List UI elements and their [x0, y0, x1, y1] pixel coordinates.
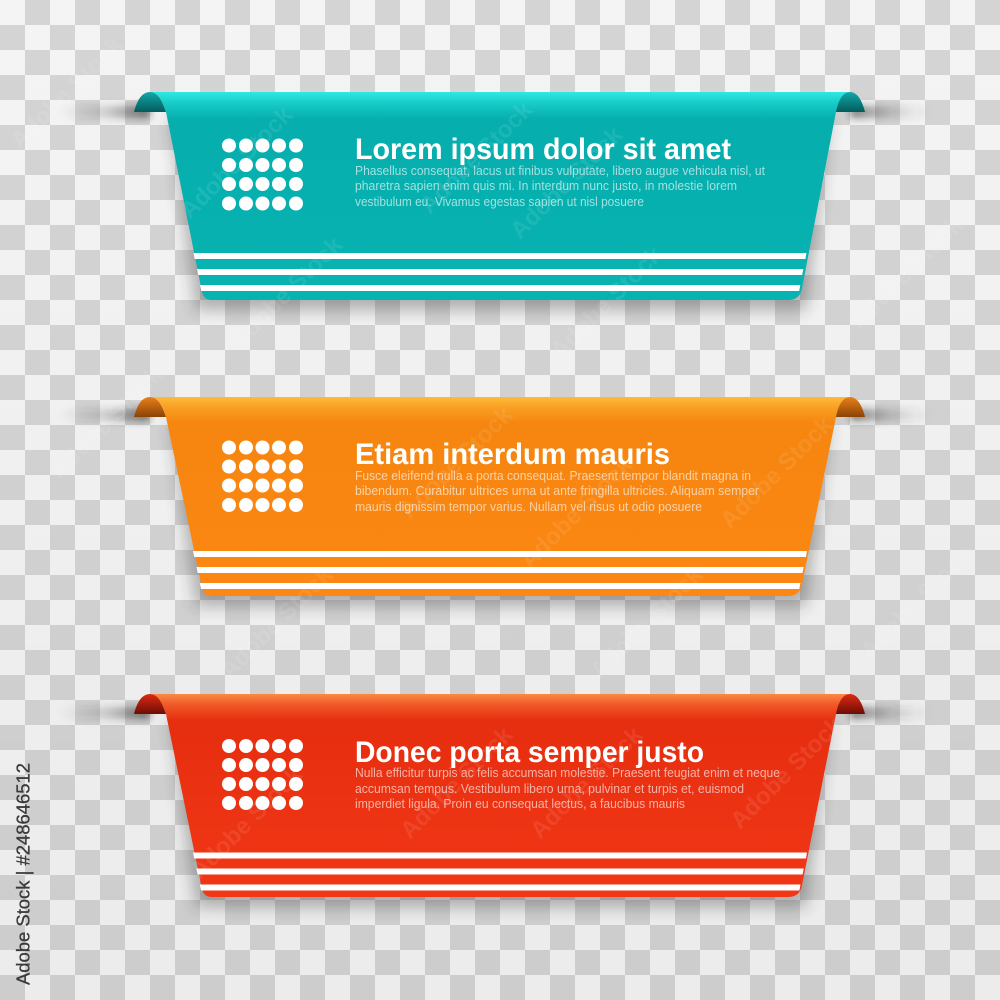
watermarks: Adobe Stock — [715, 411, 838, 534]
teal dot grid icon — [222, 138, 303, 210]
teal left curl — [134, 92, 166, 112]
watermarks: Adobe Stock — [845, 211, 968, 334]
stock id vertical label: Adobe Stock | #248646512 — [14, 763, 34, 985]
teal ribbon body — [150, 92, 850, 300]
watermarks: Adobe Stock — [525, 721, 648, 844]
teal right curl — [834, 92, 865, 112]
red right curl — [834, 694, 865, 714]
watermarks: Adobe Stock — [855, 541, 978, 664]
teal stripes — [194, 253, 806, 291]
watermarks: Adobe Stock — [585, 561, 708, 684]
watermarks: Adobe Stock — [415, 96, 538, 219]
red body text: accumsan tempus. Vestibulum libero urna, pulvinar et turpis et, euismod — [355, 781, 744, 796]
red banner shadow — [60, 707, 930, 907]
teal banner shadow — [60, 106, 930, 310]
teal heading: Lorem ipsum dolor sit amet — [355, 133, 731, 166]
orange right curl — [834, 397, 865, 417]
red left curl — [134, 694, 166, 714]
watermarks: Adobe Stock — [175, 101, 298, 224]
orange ribbon body — [150, 397, 850, 596]
watermarks: Adobe Stock — [545, 241, 668, 364]
panel: red banner — [60, 694, 930, 907]
red dot grid icon — [222, 739, 303, 810]
red body text — [355, 765, 780, 811]
watermarks: Adobe Stock — [515, 451, 638, 574]
teal body text — [355, 163, 765, 209]
watermarks: Adobe Stock — [225, 231, 348, 354]
watermarks: Adobe Stock — [505, 121, 628, 244]
orange dot grid icon — [222, 440, 303, 512]
watermarks: Adobe Stock — [395, 721, 518, 844]
watermarks: Adobe Stock — [725, 711, 848, 834]
teal body text: vestibulum eu. Vivamus egestas sapien ut nisl posuere — [355, 194, 644, 209]
orange stripes — [193, 551, 807, 589]
red heading: Donec porta semper justo — [355, 736, 704, 769]
watermarks: Adobe Stock — [215, 561, 338, 684]
red stripes — [193, 852, 807, 890]
panel: teal banner — [60, 92, 930, 310]
watermarks: Adobe Stock — [185, 761, 308, 884]
orange body text — [355, 468, 760, 514]
red body text: imperdiet ligula. Proin eu consequat lectus, a faucibus mauris — [355, 796, 685, 811]
orange heading: Etiam interdum mauris — [355, 438, 670, 471]
orange body text: bibendum. Curabitur ultrices urna ut ante fringilla ultricies. Aliquam semper — [355, 483, 760, 498]
watermarks: Adobe Stock — [5, 31, 128, 154]
orange banner shadow — [60, 409, 930, 606]
orange body text: Fusce eleifend nulla a porta consequat. Praesent tempor blandit magna in — [355, 468, 751, 483]
orange left curl — [134, 397, 166, 417]
watermarks: Adobe Stock — [395, 401, 518, 524]
red body text: Nulla efficitur turpis ac felis accumsan molestie. Praesent feugiat enim et neque — [355, 765, 780, 780]
red ribbon body — [150, 694, 850, 897]
watermarks: Adobe Stock — [45, 361, 168, 484]
orange body text: mauris dignissim tempor varius. Nullam vel risus ut odio posuere — [355, 499, 702, 514]
teal body text: pharetra sapien enim quis mi. In interdum nunc justo, in molestie lorem — [355, 178, 737, 193]
panel: orange banner — [60, 397, 930, 606]
teal body text: Phasellus consequat, lacus ut finibus vulputate, libero augue vehicula nisl, ut — [355, 163, 765, 178]
